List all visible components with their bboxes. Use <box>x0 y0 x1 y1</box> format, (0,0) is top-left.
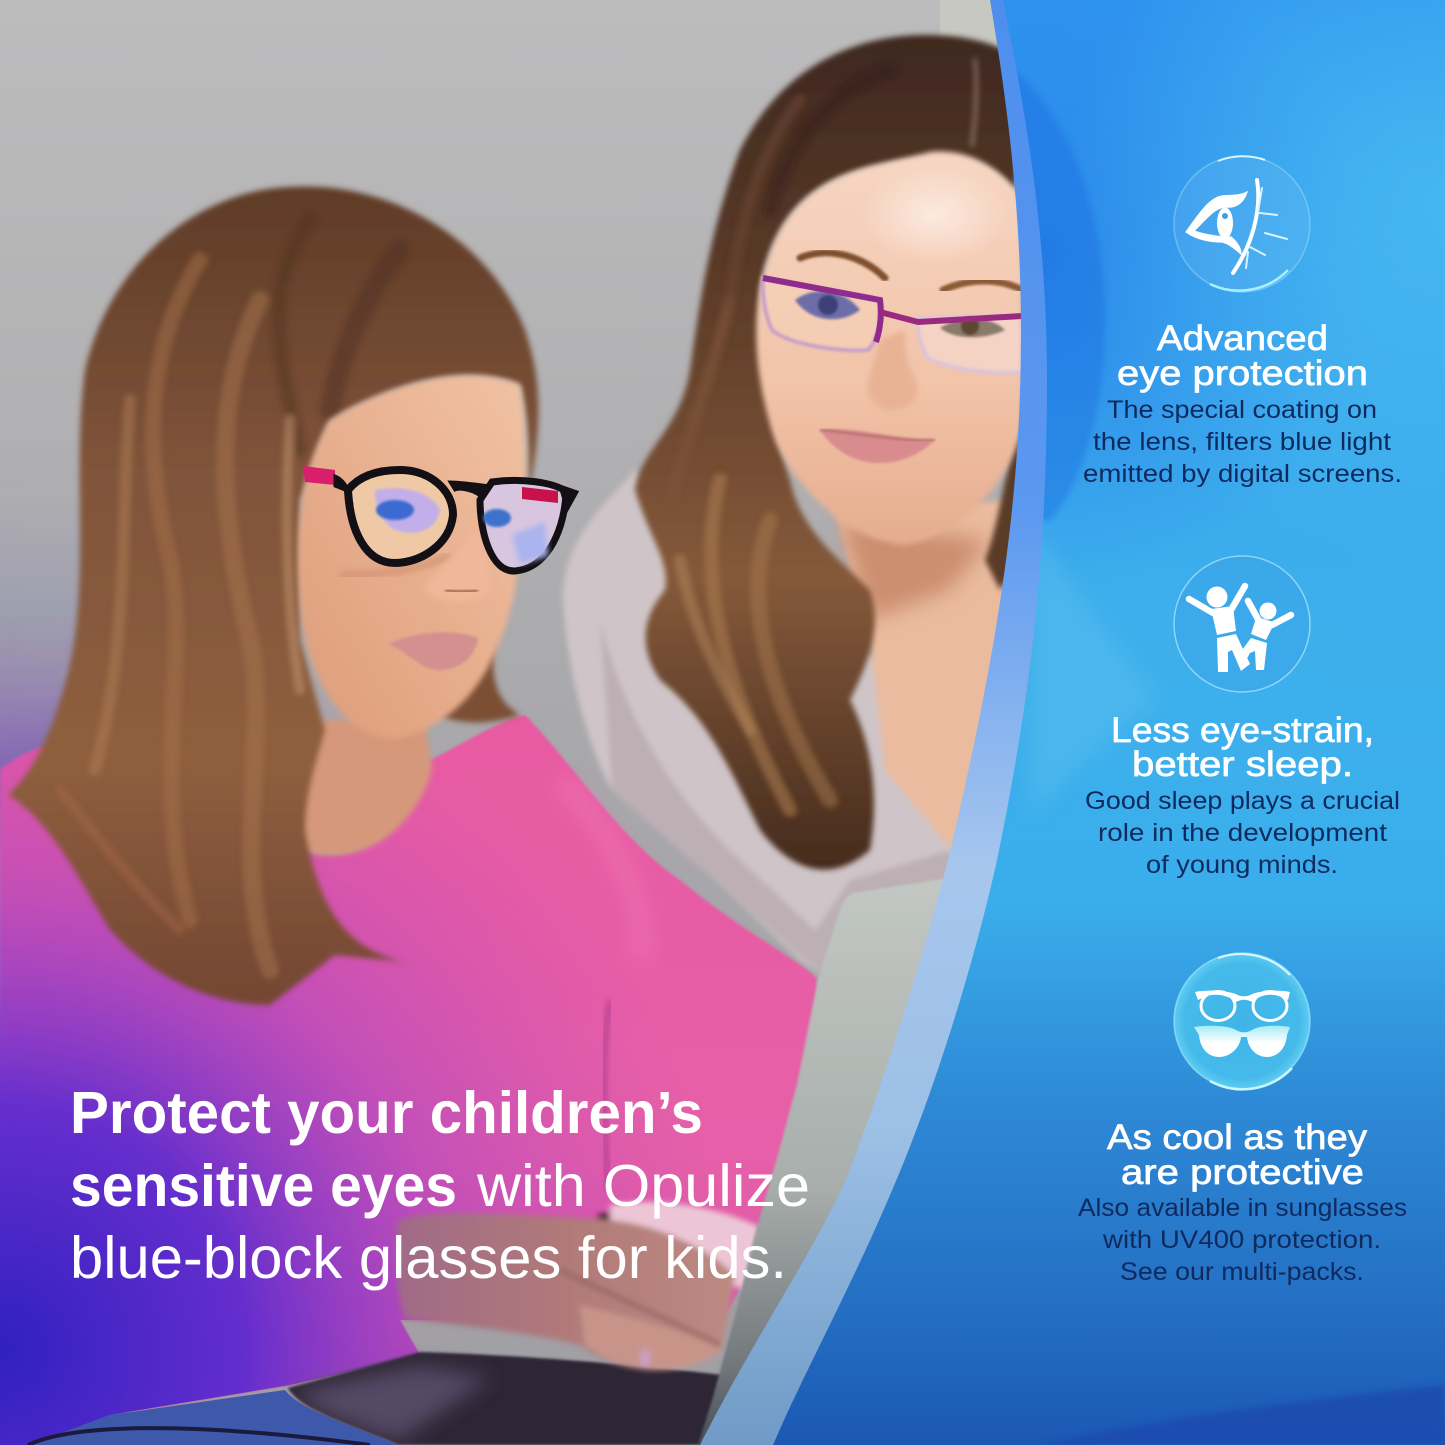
headline: sensitive eyes <box>70 1153 457 1219</box>
heading and text: advanced eye protection: The special coating on <box>1107 396 1377 424</box>
heading and text: less eye-strain <box>1085 711 1400 879</box>
photo: mother and daughter at laptop <box>0 0 1060 1445</box>
heading and text: as cool as they are protective: Also available in sunglasses <box>1078 1194 1407 1222</box>
laptop base and cable <box>28 1390 398 1445</box>
heading and text: advanced eye protection <box>1083 319 1402 488</box>
translucent lens band <box>700 0 1060 1445</box>
girl: face <box>298 376 525 738</box>
headline <box>70 1080 810 1291</box>
mother: purple glasses <box>763 278 1022 373</box>
girl: black and pink glasses <box>303 466 577 571</box>
heading and text: as cool as they are protective <box>1078 1118 1407 1286</box>
laptop keyboard base <box>288 1352 722 1445</box>
mother: hair <box>635 35 1025 870</box>
icon: jumping parent and child <box>1174 556 1310 692</box>
girl: hair <box>8 186 538 1005</box>
panel: blue background <box>700 0 1445 1445</box>
icon: clear glasses and sunglasses <box>1174 953 1310 1089</box>
ghost silhouette <box>1018 74 1105 522</box>
wall background <box>0 0 1060 1445</box>
heading and text: as cool as they are protective: with UV400 protection. <box>1102 1226 1381 1254</box>
girl: hand on keyboard <box>396 1202 765 1370</box>
heading and text: as cool as they are protective: are protective <box>1121 1153 1364 1192</box>
mother: neck and chest <box>835 500 1020 850</box>
headline: Protect your children’s <box>70 1080 703 1146</box>
heading and text: advanced eye protection: eye protection <box>1117 354 1368 393</box>
mother: face <box>756 151 1022 545</box>
heading and text: less eye-strain: Less eye-strain, <box>1111 711 1374 750</box>
purple colour wash <box>0 610 740 1445</box>
headline: blue-block glasses for kids. <box>70 1225 787 1291</box>
heading and text: advanced eye protection: emitted by digital screens. <box>1083 460 1402 488</box>
icon: eye protection <box>1174 156 1310 292</box>
girl: neck <box>300 720 432 855</box>
laptop lid <box>698 870 1000 1445</box>
heading and text: less eye-strain: better sleep. <box>1132 745 1353 784</box>
headline: with Opulize <box>476 1153 810 1219</box>
mother: sweater <box>563 470 1000 978</box>
girl: pink sweater <box>0 715 817 1445</box>
heading and text: less eye-strain: Good sleep plays a crucial <box>1085 787 1400 815</box>
heading and text: less eye-strain: of young minds. <box>1146 851 1338 879</box>
heading and text: as cool as they are protective: See our multi-packs. <box>1120 1258 1364 1286</box>
heading and text: as cool as they are protective: As cool as they <box>1107 1118 1368 1157</box>
heading and text: less eye-strain: role in the development <box>1098 819 1387 847</box>
heading and text: advanced eye protection: the lens, filters blue light <box>1093 428 1391 456</box>
heading and text: advanced eye protection: Advanced <box>1157 319 1328 358</box>
